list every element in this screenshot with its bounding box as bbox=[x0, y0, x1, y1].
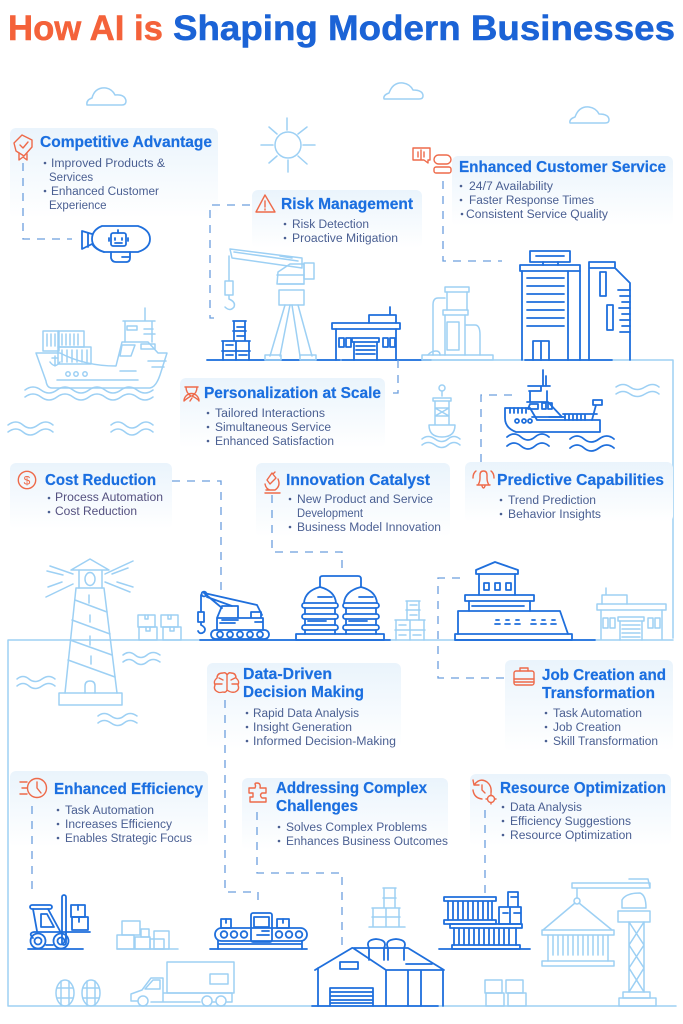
illustration: delivery truck bbox=[131, 962, 234, 1006]
illustration: office buildings bbox=[520, 251, 630, 360]
list: Development bbox=[297, 508, 364, 520]
panel: enhanced efficiency bbox=[10, 771, 208, 847]
icon: dollar coin bbox=[18, 471, 36, 489]
illustration: round barrels bbox=[56, 980, 100, 1006]
list: Behavior Insights bbox=[508, 509, 601, 521]
list: Improved Products & bbox=[51, 158, 165, 170]
panel: data-driven decision making bbox=[207, 663, 401, 749]
icon: bell bbox=[473, 471, 494, 488]
heading: Innovation Catalyst bbox=[286, 472, 430, 489]
list bbox=[545, 708, 658, 748]
list: Task Automation bbox=[553, 708, 642, 720]
list: Consistent Service Quality bbox=[466, 209, 608, 221]
illustration: tower crane with container bbox=[542, 879, 656, 1006]
title: How AI is bbox=[8, 9, 163, 48]
list bbox=[57, 805, 192, 845]
icon: badge bbox=[14, 135, 32, 160]
list: Enhanced Satisfaction bbox=[215, 436, 334, 448]
list: Skill Transformation bbox=[553, 736, 658, 748]
panel: cost reduction bbox=[10, 463, 172, 529]
heading bbox=[542, 667, 666, 702]
list: Job Creation bbox=[553, 722, 621, 734]
heading: Data-Driven bbox=[243, 666, 332, 683]
heading: Competitive Advantage bbox=[40, 134, 212, 151]
waves: sea decorations bbox=[8, 384, 659, 726]
list: Efficiency Suggestions bbox=[510, 816, 631, 828]
icon: fast clock bbox=[20, 778, 46, 798]
icon: warning triangle bbox=[256, 195, 275, 212]
list bbox=[284, 219, 398, 245]
list: Task Automation bbox=[65, 805, 154, 817]
illustration: buoy bbox=[422, 385, 460, 448]
heading: Addressing Complex bbox=[276, 780, 427, 797]
list: Faster Response Times bbox=[469, 195, 594, 207]
icon: puzzle piece bbox=[249, 783, 266, 802]
heading bbox=[276, 780, 427, 815]
list: Informed Decision-Making bbox=[253, 736, 396, 748]
illustration: forklift bbox=[28, 895, 90, 949]
list: Rapid Data Analysis bbox=[253, 708, 359, 720]
illustration: harbor crane bbox=[225, 249, 316, 360]
icon: clouds bbox=[87, 83, 609, 123]
list bbox=[289, 494, 441, 534]
icon: sun bbox=[261, 118, 315, 172]
list: 24/7 Availability bbox=[469, 181, 553, 193]
icon: dollar coin: $ bbox=[24, 474, 31, 488]
list: Risk Detection bbox=[292, 219, 369, 231]
illustration: conveyor belt bbox=[210, 913, 307, 949]
heading: Decision Making bbox=[243, 684, 364, 701]
icon: chat and chatbot bbox=[413, 148, 451, 173]
list: Solves Complex Problems bbox=[286, 822, 427, 834]
illustration: light barrels stack bbox=[395, 601, 425, 640]
list: Cost Reduction bbox=[55, 506, 137, 518]
icon: briefcase bbox=[514, 668, 534, 685]
list bbox=[500, 495, 601, 521]
illustration: light boxes, bottom bbox=[485, 980, 526, 1006]
illustration: cargo ship, left bbox=[36, 308, 167, 388]
icon: microscope bbox=[265, 472, 280, 493]
heading: Transformation bbox=[542, 685, 655, 702]
panel: innovation catalyst bbox=[256, 463, 450, 537]
illustration: light crates above warehouse bbox=[369, 888, 405, 927]
panel: enhanced customer service bbox=[413, 148, 673, 226]
heading: Resource Optimization bbox=[500, 780, 666, 797]
illustration: storage tanks bbox=[296, 576, 384, 640]
heading: Job Creation and bbox=[542, 667, 666, 684]
illustration: shipping containers bbox=[439, 892, 530, 949]
illustration: ship, right bbox=[505, 370, 614, 451]
illustration: small warehouse bbox=[332, 307, 400, 360]
icon: brain bbox=[214, 673, 239, 692]
list: Insight Generation bbox=[253, 722, 352, 734]
list: Data Analysis bbox=[510, 802, 582, 814]
list bbox=[460, 181, 608, 221]
list: Enhances Business Outcomes bbox=[286, 836, 448, 848]
list: Services bbox=[49, 172, 93, 184]
list: Enables Strategic Focus bbox=[65, 833, 192, 845]
panel: personalization at scale bbox=[180, 378, 385, 448]
list bbox=[48, 492, 163, 518]
heading: Enhanced Customer Service bbox=[459, 159, 666, 176]
list: Enhanced Customer bbox=[51, 186, 159, 198]
heading bbox=[243, 666, 364, 701]
ground lines and frame bbox=[8, 360, 676, 1006]
heading: Personalization at Scale bbox=[204, 385, 381, 402]
illustration: light warehouse bbox=[597, 588, 666, 640]
list bbox=[207, 408, 334, 448]
heading: Cost Reduction bbox=[45, 472, 156, 489]
illustration: central building bbox=[455, 562, 572, 640]
list: Resource Optimization bbox=[510, 830, 632, 842]
panel: predictive capabilities bbox=[465, 462, 673, 522]
heading: Challenges bbox=[276, 798, 358, 815]
panel: risk management bbox=[252, 190, 422, 248]
icon: hourglass bbox=[184, 387, 199, 401]
heading: Risk Management bbox=[281, 196, 413, 213]
dashed connector lines bbox=[23, 163, 516, 950]
list bbox=[44, 158, 165, 212]
illustration: stacked barrels bbox=[222, 321, 250, 360]
title: Shaping Modern Businesses bbox=[173, 9, 675, 48]
panel: competitive advantage bbox=[10, 128, 218, 218]
icon: clock with gear bbox=[473, 780, 496, 804]
list: Proactive Mitigation bbox=[292, 233, 398, 245]
list: Simultaneous Service bbox=[215, 422, 331, 434]
list: Business Model Innovation bbox=[297, 522, 441, 534]
list: Experience bbox=[49, 200, 107, 212]
illustration: crawler crane bbox=[198, 592, 269, 639]
list bbox=[502, 802, 632, 842]
icon: blimp with robot bbox=[82, 226, 150, 262]
list: New Product and Service bbox=[297, 494, 433, 506]
panel: job creation and transformation bbox=[505, 660, 673, 752]
list: Process Automation bbox=[55, 492, 163, 504]
heading: Enhanced Efficiency bbox=[54, 781, 203, 798]
list bbox=[278, 822, 448, 848]
panel: resource optimization bbox=[470, 774, 671, 846]
illustration: large warehouse bbox=[312, 939, 444, 1006]
list: Increases Efficiency bbox=[65, 819, 172, 831]
panel: addressing complex challenges bbox=[242, 778, 448, 850]
list: Tailored Interactions bbox=[215, 408, 325, 420]
illustration: industrial machine bbox=[422, 287, 493, 360]
heading: Predictive Capabilities bbox=[497, 472, 664, 489]
list bbox=[246, 708, 396, 748]
list: Trend Prediction bbox=[508, 495, 596, 507]
illustration: lighthouse bbox=[46, 559, 133, 705]
illustration: stacked boxes, middle left bbox=[138, 615, 181, 640]
illustration: light boxes pile bbox=[117, 921, 178, 949]
